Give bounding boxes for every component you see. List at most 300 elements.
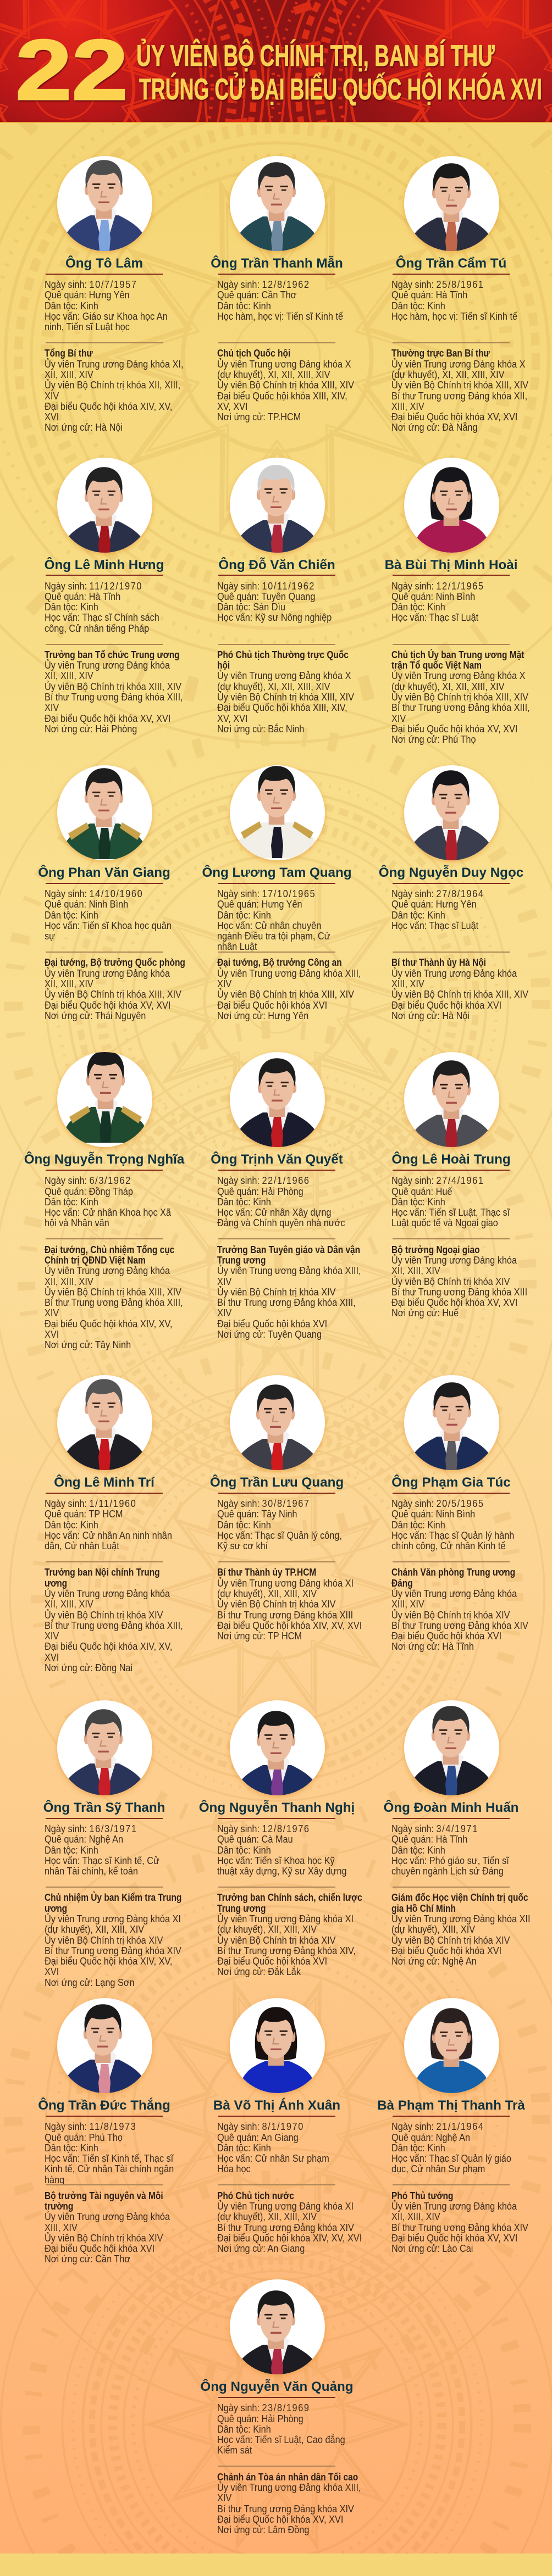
personal info: Kiểm sát [217, 2445, 252, 2456]
roles: Nơi ứng cử: Thái Nguyên [45, 1010, 146, 1021]
roles: Trưởng ban Chính sách, chiến lược [217, 1892, 362, 1903]
roles: Nơi ứng cử: Tây Ninh [45, 1339, 131, 1350]
roles: Ủy viên Trung ương Đảng khóa X [391, 359, 525, 370]
name: Ông Nguyễn Thanh Nghị [199, 1800, 355, 1815]
panel: Ông Nguyễn Văn Quảng [217, 2279, 382, 2576]
personal info: ninh, Tiến sĩ Luật học [45, 321, 130, 332]
personal info: Ngày sinh: 12/8/1976 [217, 1823, 310, 1834]
roles: Đại biểu Quốc hội khóa XVI [217, 1000, 327, 1011]
personal info: nhân Luật [217, 941, 257, 952]
name: Ông Nguyễn Văn Quảng [200, 2379, 354, 2394]
roles: Đại biểu Quốc hội khóa XVI [391, 1000, 501, 1011]
personal info: Dân tộc: Kinh [217, 1520, 271, 1531]
icon: portrait Võ Thị Ánh Xuân [230, 1998, 325, 2093]
personal info: sự [45, 931, 55, 942]
roles: Nơi ứng cử: Hà Tĩnh [391, 1641, 474, 1652]
roles: hội [217, 660, 230, 671]
personal info [217, 2122, 329, 2175]
personal info: Học hàm, học vị: Tiến sĩ Kinh tế [391, 311, 517, 322]
personal info [217, 2403, 345, 2456]
panel: Ông Tô Lâm [45, 155, 183, 433]
roles: (dự khuyết), XII, XIII, XIV [217, 1924, 317, 1935]
personal info: Dân tộc: Kinh [217, 301, 271, 311]
roles: Ủy viên Bộ Chính trị khóa XIII, XIV [45, 1287, 181, 1298]
personal info: hàng [45, 2174, 64, 2185]
roles [45, 1567, 183, 1673]
roles: Bí thư Trung ương Đảng khóa XIV [391, 2222, 528, 2233]
personal info: Dân tộc: Sán Dìu [217, 602, 285, 613]
roles [45, 958, 192, 1021]
icon: portrait Trịnh Văn Quyết [230, 1052, 325, 1147]
roles: Đại biểu Quốc hội khóa XVI [391, 1945, 501, 1956]
roles: (dự khuyết), XI, XII, XIII, XIV [391, 681, 505, 692]
roles: XIII, XIV [391, 401, 424, 412]
personal info: Quê quán: Hưng Yên [391, 899, 477, 910]
roles: (dự khuyết), XI, XII, XIII, XIV [217, 369, 330, 380]
roles: XII, XIII, XIV [45, 369, 93, 380]
roles: XII, XIII, XIV [45, 1599, 93, 1610]
name: Ông Phan Văn Giang [38, 865, 170, 880]
personal info [45, 580, 159, 634]
personal info: Ngày sinh: 11/8/1973 [45, 2121, 136, 2132]
roles: Bí thư Trung ương Đảng khóa XII, [391, 391, 527, 402]
icon: portrait Phạm Thị Thanh Trà [404, 1998, 499, 2093]
roles: Ủy viên Trung ương Đảng khóa XI [217, 1578, 354, 1589]
roles: Đại biểu Quốc hội khóa XV, XVI [391, 724, 517, 735]
roles: Nơi ứng cử: Hưng Yên [217, 1010, 308, 1021]
personal info: Quê quán: Hưng Yên [45, 290, 130, 301]
name: Bà Võ Thị Ánh Xuân [213, 2098, 340, 2113]
roles: XIV [45, 1631, 59, 1642]
roles [391, 1893, 536, 1967]
roles: XII, XIII, XIV [391, 2211, 440, 2222]
roles: Ủy viên Trung ương Đảng khóa XI [217, 1913, 354, 1924]
roles: ương [45, 1578, 67, 1589]
panel: Ông Đỗ Văn Chiến [217, 457, 354, 735]
icon: portrait Tô Lâm [57, 156, 152, 251]
roles: XIV [217, 1308, 231, 1318]
personal info: Học vấn: Thạc sĩ Kinh tế, Cử [45, 1855, 159, 1866]
roles: Chánh Văn phòng Trung ương [391, 1567, 515, 1578]
personal info: Quê quán: Tuyên Quang [217, 591, 315, 602]
roles [391, 2191, 528, 2254]
personal info [45, 1176, 171, 1229]
roles: XV, XVI [217, 713, 248, 724]
roles: Giám đốc Học viện Chính trị quốc [391, 1892, 528, 1903]
icon: portrait Đỗ Văn Chiến [230, 457, 325, 553]
roles: Đại biểu Quốc hội khóa XV, XVI [45, 1000, 170, 1011]
name: Ông Trần Cẩm Tú [396, 256, 506, 271]
roles: XII, XIII, XIV [45, 978, 93, 989]
icon: portrait Đoàn Minh Huấn [404, 1700, 499, 1795]
icon: portrait Trần Thanh Mẫn [230, 156, 325, 251]
name: Ông Trần Đức Thắng [38, 2098, 170, 2113]
personal info: Dân tộc: Kinh [217, 910, 271, 921]
panel: Ông Trần Lưu Quang [217, 1375, 382, 1672]
roles: Đại biểu Quốc hội khóa XIII, XIV, [217, 391, 347, 402]
roles: XV, XVI [217, 401, 248, 412]
roles: Ủy viên Bộ Chính trị khóa XIII, XIV [217, 692, 354, 703]
roles: Nơi ứng cử: Nghệ An [391, 1956, 477, 1967]
roles: XVI [45, 1966, 59, 1977]
roles: Nơi ứng cử: Đà Nẵng [391, 422, 478, 433]
personal info: Dân tộc: Kinh [217, 1845, 271, 1856]
icon: portrait Phạm Gia Túc [404, 1375, 499, 1470]
roles: Bí thư Trung ương Đảng khóa XIII, [45, 1297, 183, 1308]
roles: Đại biểu Quốc hội khóa XIV, XV, [45, 1318, 172, 1329]
roles: XIV [45, 702, 59, 713]
roles: XIV [217, 1276, 231, 1287]
personal info: Quê quán: Cà Mau [217, 1834, 293, 1845]
roles: Ủy viên Trung ương Đảng khóa [391, 968, 517, 979]
roles: Bí thư Trung ương Đảng khóa XIII [217, 1610, 353, 1621]
personal info [217, 1824, 347, 1877]
personal info: Ngày sinh: 25/8/1961 [391, 279, 484, 290]
roles: Trưởng ban Nội chính Trung [45, 1567, 160, 1578]
roles: Trưởng ban Tổ chức Trung ương [45, 649, 180, 660]
roles: Ủy viên Trung ương Đảng khóa [45, 660, 170, 671]
roles: Bộ trưởng Tài nguyên và Môi [45, 2190, 163, 2201]
roles: Chủ tịch Ủy ban Trung ương Mặt [391, 649, 524, 660]
roles: Nơi ứng cử: Đắk Lắk [217, 1966, 301, 1977]
panel: Ông Phạm Gia Túc [391, 1375, 552, 1672]
personal info [217, 279, 343, 322]
roles: Đại biểu Quốc hội khóa XV, XVI [391, 2233, 517, 2244]
panel: Ông Trần Đức Thắng [45, 1998, 209, 2295]
panel: Ông Lê Minh Trí [45, 1375, 209, 1672]
personal info: Quê quán: Hải Phòng [217, 1186, 303, 1197]
roles: ương [45, 1903, 67, 1914]
personal info: Ngày sinh: 14/10/1960 [45, 888, 143, 899]
roles: Ủy viên Bộ Chính trị khóa XIV [391, 1276, 510, 1287]
personal info: Dân tộc: Kinh [391, 1845, 445, 1856]
roles: Ủy viên Trung ương Đảng khóa XIII, [217, 2482, 361, 2493]
roles: Bí thư Trung ương Đảng khóa XIII, [45, 692, 183, 703]
roles: Ủy viên Bộ Chính trị khóa XIV [391, 1610, 510, 1621]
personal info: Đảng và Chính quyền nhà nước [217, 1217, 345, 1228]
roles: Ủy viên Trung ương Đảng khóa [45, 1265, 170, 1276]
personal info [45, 2122, 174, 2185]
roles: Đại tướng, Bộ trưởng Công an [217, 957, 342, 968]
personal info: Ngày sinh: 27/4/1961 [391, 1175, 484, 1186]
personal info: Ngày sinh: 27/8/1964 [391, 888, 484, 899]
roles: Ủy viên Trung ương Đảng khóa XII [391, 1913, 530, 1924]
personal info: Dân tộc: Kinh [391, 2143, 445, 2154]
name: Ông Trần Sỹ Thanh [43, 1800, 165, 1815]
roles: Ủy viên Bộ Chính trị khóa XIII, XIV [217, 380, 354, 391]
roles: Ủy viên Trung ương Đảng khóa X [391, 670, 525, 681]
name: Ông Lương Tam Quang [202, 865, 352, 880]
personal info [391, 581, 484, 624]
roles: Đại biểu Quốc hội khóa XIV, XV, XVI [217, 1620, 362, 1631]
personal info [45, 1824, 159, 1877]
name: Ông Đoàn Minh Huấn [384, 1800, 518, 1815]
personal info: Dân tộc: Kinh [45, 2143, 98, 2154]
personal info: Ngày sinh: 3/4/1971 [391, 1823, 478, 1834]
roles: XIV [391, 713, 406, 724]
roles: Ủy viên Trung ương Đảng khóa X [217, 670, 351, 681]
roles: Nơi ứng cử: Hà Nội [391, 1010, 470, 1021]
roles: Ủy viên Trung ương Đảng khóa [45, 1588, 170, 1599]
personal info: chính công, Cử nhân Kinh tế [391, 1540, 505, 1551]
roles: Nơi ứng cử: Bắc Ninh [217, 724, 304, 735]
roles: Ủy viên Bộ Chính trị khóa XIII, XIV [391, 692, 528, 703]
panel: Ông Phan Văn Giang [45, 765, 209, 1062]
roles [391, 1567, 528, 1653]
personal info [217, 1499, 342, 1551]
roles [217, 1245, 368, 1340]
roles: Bí thư Trung ương Đảng khóa XIV [45, 1945, 181, 1956]
roles: XVI [45, 411, 59, 422]
roles: (dự khuyết), XII, XIII, XIV [45, 1924, 144, 1935]
icon: portrait Phan Văn Giang [57, 765, 152, 860]
personal info: Quê quán: Hải Phòng [217, 2413, 303, 2424]
roles: Bí thư Trung ương Đảng khóa XIV, [217, 1945, 356, 1956]
panel: Ông Nguyễn Duy Ngọc [391, 765, 552, 1062]
personal info: Học vấn: Phó giáo sư, Tiến sĩ [391, 1855, 509, 1866]
icon: portrait Trần Đức Thắng [57, 1998, 152, 2093]
panel: Ông Đoàn Minh Huấn [391, 1700, 552, 1997]
roles: Ủy viên Trung ương Đảng khóa XI [217, 2201, 354, 2212]
roles: Ủy viên Bộ Chính trị khóa XIII, XIV [45, 681, 181, 692]
roles: XII, XIII, XIV [45, 1276, 93, 1287]
roles: Ủy viên Trung ương Đảng khóa XIII, [217, 968, 361, 979]
icon: portrait Trần Cẩm Tú [404, 156, 499, 251]
icon: portrait Lê Minh Trí [57, 1375, 152, 1470]
personal info [391, 1824, 509, 1877]
panel: Bà Bùi Thị Minh Hoài [391, 457, 552, 754]
roles: XIII, XIV [45, 2222, 78, 2233]
roles: Ủy viên Bộ Chính trị khóa XIII, XIV [391, 380, 528, 391]
personal info: Quê quán: Nghệ An [45, 1834, 123, 1845]
roles: Nơi ứng cử: Huế [391, 1308, 459, 1318]
personal info: Hóa học [217, 2163, 251, 2174]
personal info: Quê quán: Nghệ An [391, 2132, 470, 2143]
roles: Bộ trưởng Ngoại giao [391, 1244, 480, 1255]
roles: Nơi ứng cử: TP.HCM [217, 411, 301, 422]
roles: Đảng [391, 1578, 413, 1589]
personal info: Ngày sinh: 21/1/1964 [391, 2121, 484, 2132]
roles: Bí thư Trung ương Đảng khóa XIII [391, 1287, 527, 1298]
personal info: Học hàm, học vị: Tiến sĩ Kinh tế [217, 311, 343, 322]
icon: portrait Trần Lưu Quang [230, 1375, 325, 1470]
personal info: Ngày sinh: 30/8/1967 [217, 1498, 310, 1509]
personal info: Ngày sinh: 1/11/1960 [45, 1498, 136, 1509]
personal info: Dân tộc: Kinh [217, 2424, 271, 2435]
roles: Nơi ứng cử: Phú Thọ [391, 734, 476, 745]
roles [45, 1245, 183, 1351]
name: Ông Đỗ Văn Chiến [218, 557, 335, 572]
personal info: Dân tộc: Kinh [45, 1520, 98, 1531]
personal info: Học vấn: Cử nhân Sư phạm [217, 2153, 329, 2164]
personal info [391, 279, 517, 322]
roles: Đại biểu Quốc hội khóa XVI [45, 2243, 154, 2254]
roles: Đại biểu Quốc hội khóa XVI [217, 1956, 327, 1967]
personal info: Học vấn: Cử nhân chuyên [217, 920, 321, 931]
personal info: chuyên ngành Lịch sử Đảng [391, 1866, 504, 1877]
roles: Đại biểu Quốc hội khóa XIII, XIV, [217, 702, 347, 713]
icon: portrait Lê Hoài Trung [404, 1052, 499, 1147]
personal info: Học vấn: Cử nhân Khoa học Xã [45, 1207, 171, 1218]
roles [391, 958, 528, 1021]
roles: Phó Chủ tịch Thường trực Quốc [217, 649, 349, 660]
name: Bà Phạm Thị Thanh Trà [377, 2098, 525, 2113]
panel: Ông Trịnh Văn Quyết [217, 1052, 382, 1349]
personal info: Ngày sinh: 12/8/1962 [217, 279, 310, 290]
personal info: Học vấn: Thạc sĩ Luật [391, 920, 478, 931]
personal info: Quê quán: Hà Tĩnh [45, 591, 120, 602]
roles: Ủy viên Bộ Chính trị khóa XIV [45, 1935, 163, 1946]
name: Ông Trịnh Văn Quyết [211, 1152, 343, 1167]
personal info: dân, Cử nhân Luật [45, 1540, 119, 1551]
personal info: Ngày sinh: 20/5/1965 [391, 1498, 484, 1509]
icon: portrait Lê Minh Hưng [57, 457, 152, 553]
personal info: Kinh tế, Cử nhân Tài chính ngân [45, 2163, 174, 2174]
roles: (dự khuyết), XII, XIII, XIV [217, 1588, 317, 1599]
roles: (dự khuyết), XI, XII, XIII, XIV [391, 369, 505, 380]
personal info: hội và Nhân văn [45, 1217, 109, 1228]
roles: Chánh án Tòa án nhân dân Tối cao [217, 2472, 358, 2483]
roles: Phó Thủ tướng [391, 2190, 453, 2201]
personal info: Dân tộc: Kinh [45, 910, 98, 921]
roles: Ủy viên Bộ Chính trị khóa XIV [45, 2233, 163, 2244]
title number 22: 22 [15, 23, 128, 118]
roles: XVI [45, 1652, 59, 1663]
personal info: Quê quán: Hà Tĩnh [391, 1834, 467, 1845]
roles: Ủy viên Trung ương Đảng khóa XI, [45, 359, 183, 370]
personal info: Học vấn: Thạc sĩ Quản lý giáo [391, 2153, 511, 2164]
roles: Trung ương [217, 1255, 266, 1266]
personal info: Học vấn: Tiến sĩ Luật, Cao đẳng [217, 2434, 345, 2445]
personal info: Dân tộc: Kinh [391, 602, 445, 613]
roles: XII, XIII, XIV [391, 1265, 440, 1276]
personal info: Dân tộc: Kinh [45, 301, 98, 311]
personal info: Học vấn: Thạc sĩ Chính sách [45, 612, 159, 623]
roles: Ủy viên Trung ương Đảng khóa XI [45, 1913, 181, 1924]
name: Bà Bùi Thị Minh Hoài [385, 557, 517, 572]
personal info: Học vấn: Thạc sĩ Luật [391, 612, 478, 623]
roles: Nơi ứng cử: Lạng Sơn [45, 1977, 135, 1988]
roles: Nơi ứng cử: Hải Phòng [45, 724, 137, 735]
personal info [391, 1176, 510, 1229]
roles: Nơi ứng cử: Lâm Đồng [217, 2524, 309, 2535]
title text [136, 38, 542, 106]
roles [45, 2191, 170, 2265]
header banner [0, 0, 552, 123]
personal info [391, 1499, 514, 1551]
name: Ông Phạm Gia Túc [391, 1475, 511, 1490]
name: Ông Lê Minh Trí [54, 1475, 154, 1490]
roles: Đại biểu Quốc hội khóa XV, XVI [391, 411, 517, 422]
personal info [45, 1499, 172, 1551]
personal info: Quê quán: Cần Thơ [217, 290, 296, 301]
icon: portrait Nguyễn Thanh Nghị [230, 1700, 325, 1795]
personal info: Ngày sinh: 17/10/1965 [217, 888, 316, 899]
personal info: Học vấn: Kỹ sư Nông nghiệp [217, 612, 332, 623]
roles: Ủy viên Trung ương Đảng khóa [45, 2211, 170, 2222]
roles: Bí thư Thành ủy Hà Nội [391, 957, 486, 968]
personal info: Học vấn: Cử nhân Xây dựng [217, 1207, 331, 1218]
roles: Ủy viên Trung ương Đảng khóa X [217, 359, 351, 370]
personal info [217, 1176, 345, 1229]
roles: trận Tổ quốc Việt Nam [391, 660, 482, 671]
panel: Ông Trần Thanh Mẫn [211, 155, 354, 422]
personal info [217, 581, 332, 624]
roles: Ủy viên Bộ Chính trị khóa XIII, XIV [391, 989, 528, 1000]
roles: Chủ nhiệm Ủy ban Kiểm tra Trung [45, 1892, 181, 1903]
roles: Nơi ứng cử: Hà Nội [45, 422, 123, 433]
personal info: Luật quốc tế và Ngoại giao [391, 1217, 498, 1228]
personal info: Ngày sinh: 10/11/1962 [217, 580, 315, 591]
roles: Ủy viên Trung ương Đảng khóa [45, 968, 170, 979]
name: Ông Trần Lưu Quang [210, 1475, 344, 1490]
personal info: Kỹ sư cơ khí [217, 1540, 268, 1551]
personal info: Học vấn: Tiến sĩ Kinh tế, Thạc sĩ [45, 2153, 173, 2164]
roles: Nơi ứng cử: Cần Thơ [45, 2254, 130, 2265]
personal info: Học vấn: Tiến sĩ Luật, Thạc sĩ [391, 1207, 510, 1218]
roles: Ủy viên Bộ Chính trị khóa XIII, XIV [217, 989, 354, 1000]
roles: Đại biểu Quốc hội khóa XVI [217, 1318, 327, 1329]
roles: Đại biểu Quốc hội khóa XIV, XV, [45, 1956, 172, 1967]
personal info [217, 889, 330, 953]
name: Ông Trần Thanh Mẫn [211, 256, 343, 271]
personal info: dục, Cử nhân Sư phạm [391, 2163, 485, 2174]
personal info: Học vấn: Cử nhân An ninh nhân [45, 1530, 172, 1541]
personal info: Dân tộc: Kinh [391, 1520, 445, 1531]
personal info: Ngày sinh: 23/8/1969 [217, 2402, 310, 2413]
roles: Đại biểu Quốc hội khóa XIV, XV, [45, 1641, 172, 1652]
personal info: Ngày sinh: 11/12/1970 [45, 580, 142, 591]
roles: XIV [45, 1308, 59, 1318]
roles: XIII, XIV [391, 1599, 424, 1610]
personal info: Học vấn: Thạc sĩ Quản lý hành [391, 1530, 514, 1541]
personal info: Dân tộc: Kinh [45, 1845, 98, 1856]
roles: Nơi ứng cử: Lào Cai [391, 2243, 473, 2254]
roles: Đại biểu Quốc hội khóa XIV, XV, XVI [217, 2233, 362, 2244]
roles: Trưởng Ban Tuyên giáo và Dân vận [217, 1244, 360, 1255]
roles: Đại biểu Quốc hội khóa XV, XVI [45, 713, 170, 724]
roles [217, 2191, 362, 2254]
personal info: Dân tộc: Kinh [45, 1197, 98, 1208]
roles: trường [45, 2201, 73, 2212]
roles: Nơi ứng cử: TP HCM [217, 1631, 302, 1642]
personal info: Dân tộc: Kinh [45, 602, 98, 613]
roles: Ủy viên Trung ương Đảng khóa [391, 1255, 517, 1266]
roles: Bí thư Trung ương Đảng khóa XIII, [45, 1620, 183, 1631]
roles: XIII, XIV [391, 978, 424, 989]
roles: Đại biểu Quốc hội khóa XV, XVI [217, 2514, 343, 2525]
roles [217, 650, 355, 735]
roles: (dự khuyết), XIII, XIV [391, 1924, 475, 1935]
roles: gia Hồ Chí Minh [391, 1903, 456, 1914]
roles: Đại tướng, Chủ nhiệm Tổng cục [45, 1244, 174, 1255]
name: Ông Lê Minh Hưng [45, 557, 164, 572]
name: Ông Nguyễn Duy Ngọc [379, 865, 523, 880]
roles [217, 2472, 366, 2535]
roles: Bí thư Trung ương Đảng khóa XIV [217, 2503, 354, 2514]
roles: Nơi ứng cử: Đồng Nai [45, 1662, 133, 1673]
personal info: Quê quán: Ninh Bình [45, 899, 128, 910]
personal info: Quê quán: Đồng Tháp [45, 1186, 133, 1197]
roles: XVI [45, 1329, 59, 1340]
roles: Ủy viên Bộ Chính trị khóa XIV [217, 1935, 336, 1946]
roles: Ủy viên Bộ Chính trị khóa XIV [217, 1287, 336, 1298]
personal info: Quê quán: TP HCM [45, 1509, 123, 1520]
personal info: Dân tộc: Kinh [391, 1197, 445, 1208]
roles: Ủy viên Trung ương Đảng khóa [391, 1588, 517, 1599]
personal info: Quê quán: Hưng Yên [217, 899, 302, 910]
roles: Chính trị QĐND Việt Nam [45, 1255, 146, 1266]
